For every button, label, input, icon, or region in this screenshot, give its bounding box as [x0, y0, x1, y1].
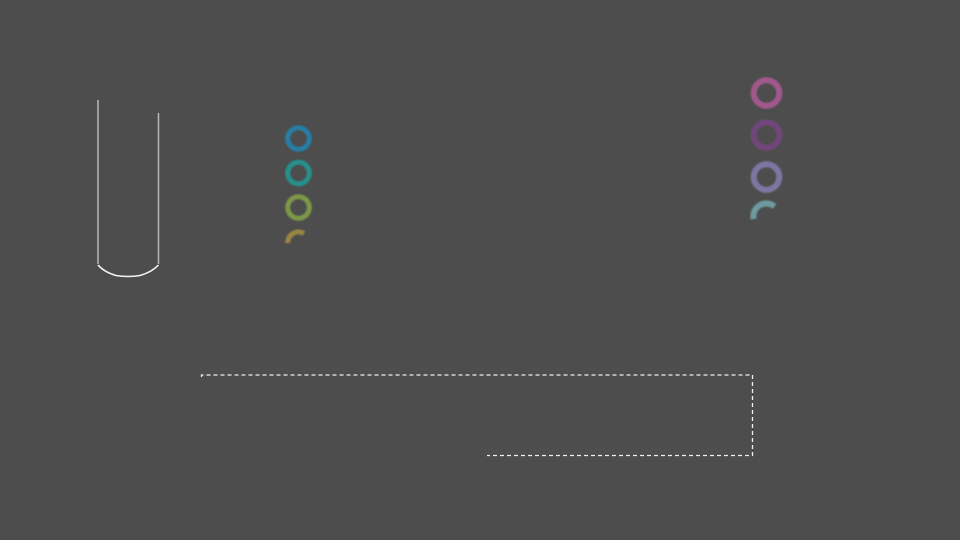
left column of coloured rings	[288, 128, 309, 243]
partial ring: amber	[288, 232, 304, 243]
ring: teal	[288, 162, 309, 184]
ring: pink	[754, 80, 779, 106]
ring: green	[288, 197, 309, 218]
ring: lavender	[754, 164, 779, 190]
partial ring: pale teal	[753, 203, 774, 219]
dashed connector	[202, 375, 752, 456]
right column of coloured rings	[753, 80, 779, 219]
ring: blue	[288, 128, 309, 149]
ring: purple	[754, 122, 779, 148]
icon: test tube outline	[98, 100, 158, 276]
